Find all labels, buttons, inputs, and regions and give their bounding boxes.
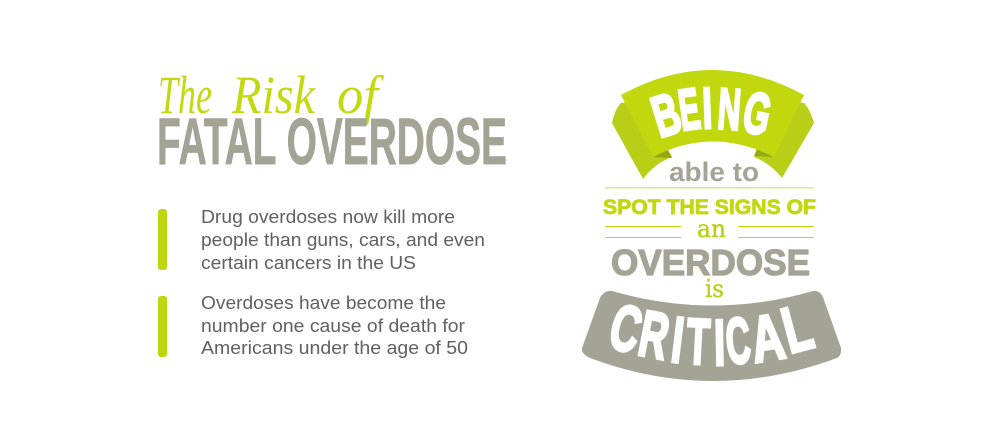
text: spot the signs of: SPOT THE SIGNS OF	[603, 196, 816, 219]
banner word CRITICAL: I	[668, 304, 688, 377]
banner word CRITICAL: A	[746, 299, 789, 376]
text: overdose: OVERDOSE	[611, 242, 810, 283]
ribbon word BEING	[644, 75, 776, 150]
badge: being able to spot the signs	[582, 70, 841, 381]
divider above spot the signs	[605, 187, 814, 188]
title script line: The	[158, 65, 212, 125]
banner word CRITICAL	[602, 289, 820, 380]
ribbon word BEING: G	[737, 80, 776, 149]
bullet text 2: number one cause of death for	[201, 316, 465, 336]
title	[157, 65, 507, 178]
ribbon word BEING: I	[701, 77, 713, 142]
banner word CRITICAL: C	[602, 291, 649, 368]
ribbon word BEING: E	[675, 75, 704, 143]
bullet bar 2	[158, 296, 167, 357]
ribbon: main band	[621, 70, 804, 157]
bullet text 2: Americans under the age of 50	[201, 338, 468, 358]
title main line: FATAL OVERDOSE	[157, 104, 507, 178]
ribbon word BEING: B	[644, 81, 688, 150]
ribbon: left tail	[612, 100, 672, 179]
bullet text 2	[201, 293, 468, 358]
bullet text 1	[201, 207, 485, 273]
banner word CRITICAL: L	[774, 289, 820, 367]
banner word CRITICAL: R	[633, 297, 675, 374]
ribbon: right tail	[754, 100, 814, 178]
bullet text 1: certain cancers in the US	[201, 253, 416, 273]
bullet point 1	[158, 207, 485, 273]
bullet text 1: people than guns, cars, and even	[201, 230, 485, 250]
divider lines beside an	[605, 226, 814, 238]
bullet text 2: Overdoses have become the	[201, 293, 446, 313]
text: able to: able to	[669, 157, 759, 187]
text: is: is	[705, 275, 724, 303]
banner word CRITICAL: C	[723, 303, 753, 378]
title script line	[158, 65, 385, 125]
ribbon: right fold	[754, 149, 774, 157]
bullet bar 1	[158, 209, 167, 270]
title script line: Risk	[231, 65, 316, 125]
bullet text 1: Drug overdoses now kill more	[201, 207, 455, 227]
ribbon: left fold	[653, 150, 672, 158]
banner word CRITICAL: T	[685, 306, 712, 379]
title script line: of	[337, 65, 385, 125]
ribbon word BEING: N	[716, 76, 743, 142]
banner: grey curved band	[582, 291, 841, 381]
text: an: an	[697, 215, 726, 243]
banner word CRITICAL: I	[713, 307, 726, 380]
bullet point 2	[158, 293, 468, 358]
